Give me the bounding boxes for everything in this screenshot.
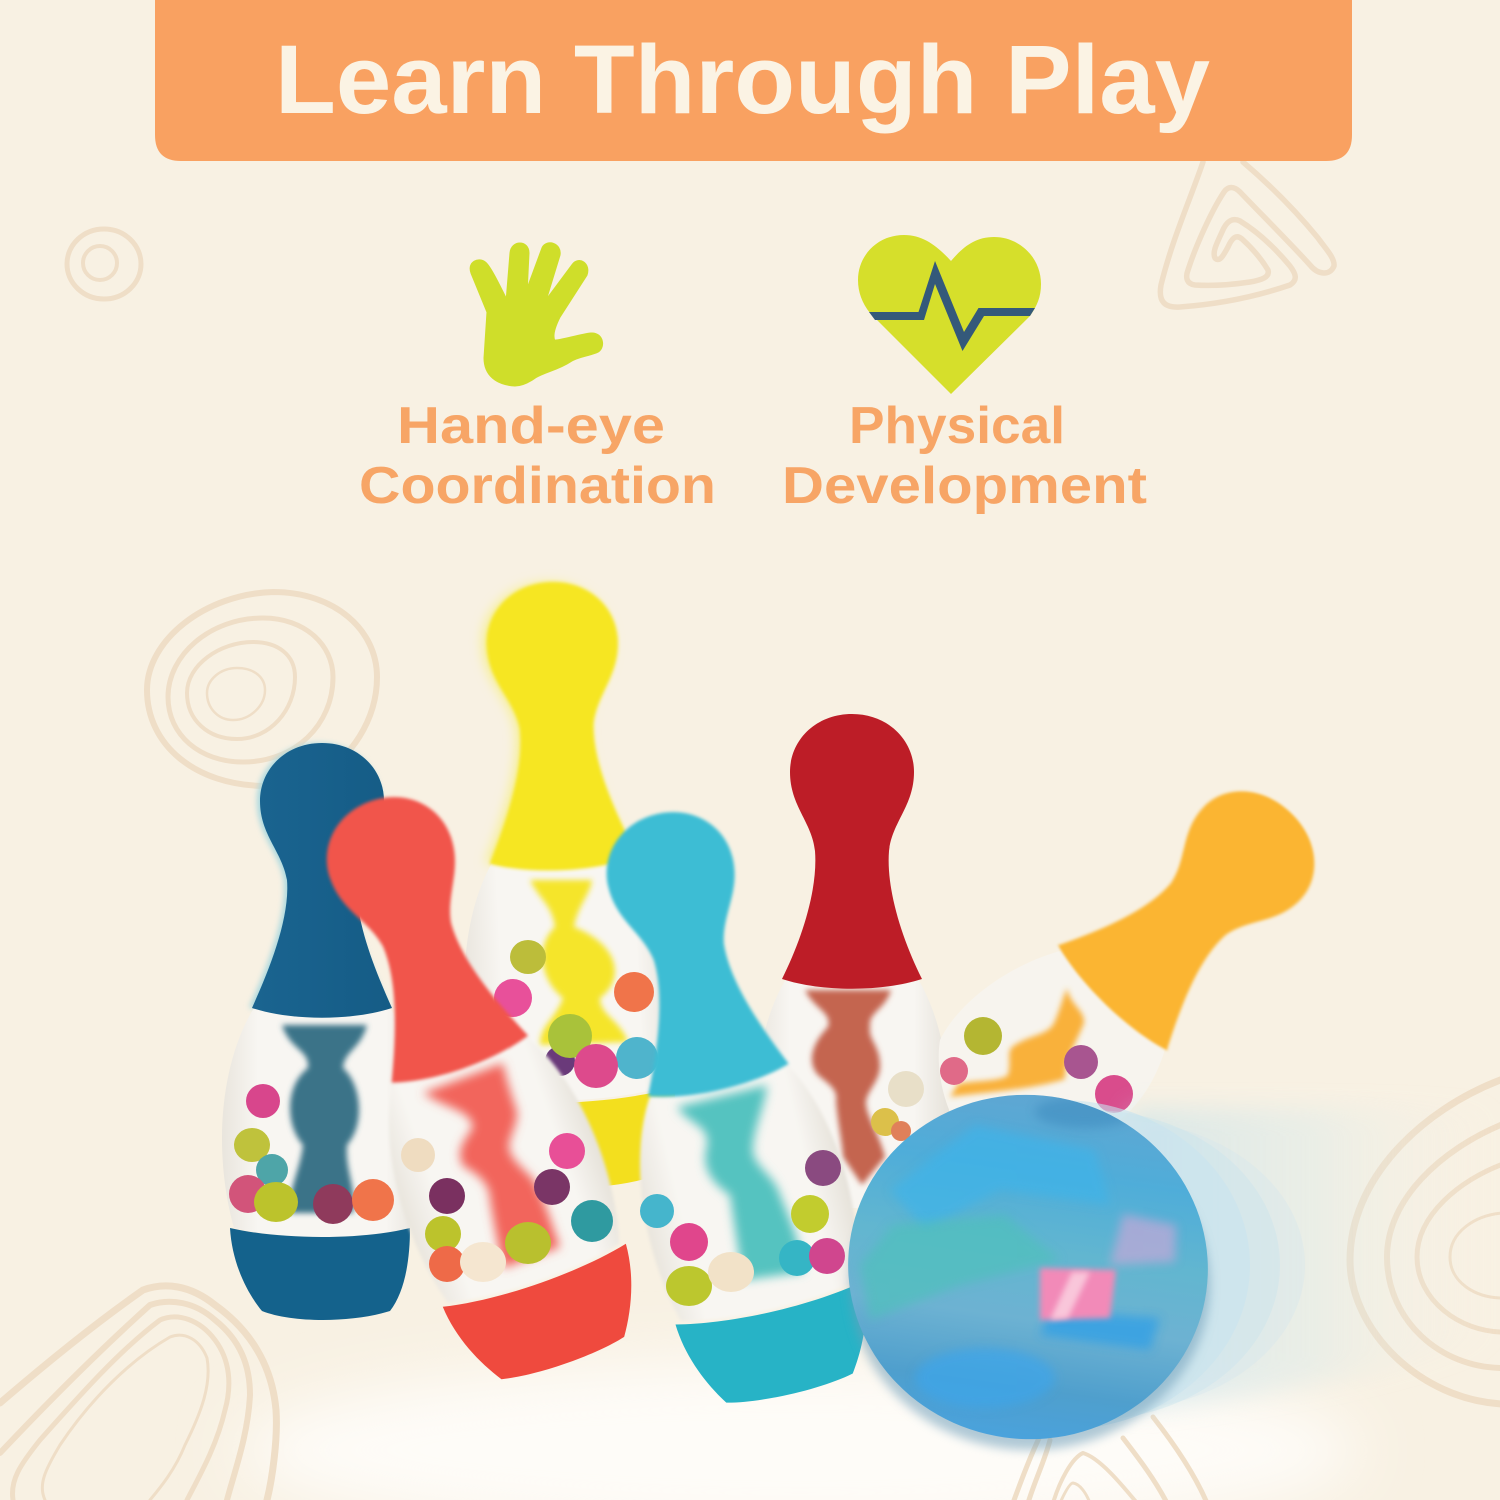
title: Learn Through Play bbox=[275, 25, 1210, 134]
icon: heart with pulse bbox=[858, 235, 1041, 394]
ball motion trail bbox=[870, 1100, 1500, 1430]
coral pin bbox=[303, 778, 656, 1395]
teal pin bbox=[587, 798, 885, 1416]
blue pin bbox=[222, 743, 422, 1320]
label: physical development: Physical bbox=[849, 397, 1065, 455]
dark red pin bbox=[755, 714, 949, 1208]
title banner bbox=[155, 0, 1352, 161]
floor highlight bbox=[240, 1360, 1360, 1500]
ball shadow bbox=[850, 1120, 1210, 1450]
orange pin bbox=[939, 760, 1345, 1130]
label: physical development bbox=[782, 397, 1147, 515]
label: hand-eye coordination: Coordination bbox=[359, 457, 716, 515]
label: hand-eye coordination: Hand-eye bbox=[397, 397, 665, 455]
light-up ball bbox=[848, 1094, 1208, 1440]
icon: hand bbox=[471, 244, 602, 385]
label: hand-eye coordination bbox=[359, 397, 716, 515]
label: physical development: Development bbox=[782, 457, 1147, 515]
yellow pin bbox=[458, 578, 682, 1193]
